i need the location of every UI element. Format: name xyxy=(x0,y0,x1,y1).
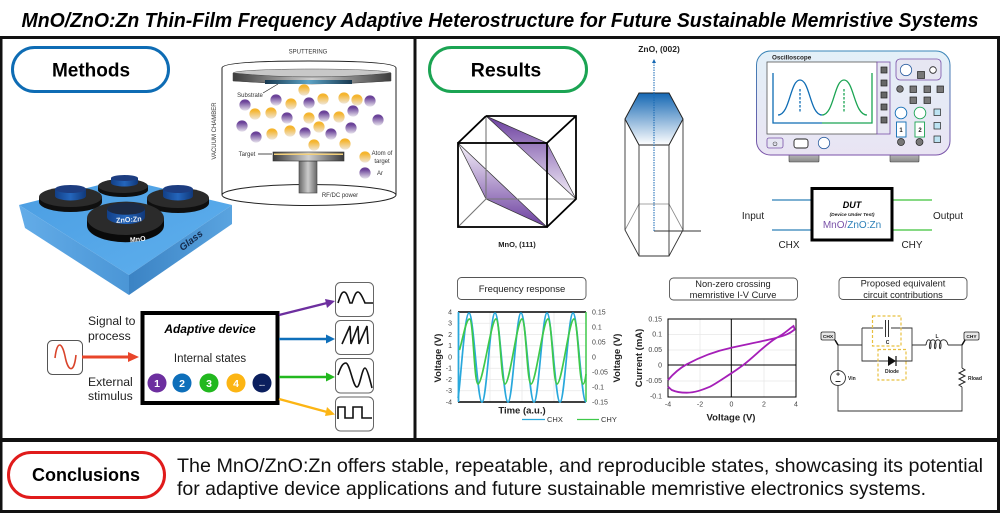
heading: methods xyxy=(12,48,168,92)
diagram: device under test xyxy=(742,188,963,251)
icon: oscilloscope: Oscilloscope xyxy=(772,54,812,62)
legend: CHY xyxy=(601,415,617,424)
diagram: ZnO prism: ZnO, (002) xyxy=(638,44,680,54)
diagram: MnO cube xyxy=(458,116,576,249)
left axis ticks: 4 xyxy=(448,310,452,316)
diagram: device under test: MnO/ZnO:Zn xyxy=(823,220,881,231)
left axis ticks: -2 xyxy=(446,377,452,384)
chart title: Non-zero crossing xyxy=(695,279,771,289)
chart title: Proposed equivalent xyxy=(861,278,946,288)
atoms of target xyxy=(249,84,363,151)
diagram: equivalent circuit: CHY xyxy=(966,334,977,340)
chart title: memristive I-V Curve xyxy=(690,290,776,300)
diagram: sputtering chamber: Ar xyxy=(377,171,383,177)
y ticks: -0.1 xyxy=(650,394,662,400)
diagram: device under test: DUT xyxy=(843,200,863,210)
label: signal to process: process xyxy=(88,329,131,343)
diagram: ZnO prism xyxy=(625,44,701,256)
diagram: sputtering chamber xyxy=(212,50,396,206)
left axis ticks: 2 xyxy=(448,332,452,339)
illustration: device on glass xyxy=(19,175,232,295)
right axis ticks: -0.15 xyxy=(592,400,608,406)
icon: oscilloscope: ⏻ xyxy=(773,141,778,148)
state circles: 3 xyxy=(206,378,212,390)
left axis ticks: -4 xyxy=(446,400,452,406)
diagram: sputtering chamber: Target xyxy=(239,152,256,158)
front disc: ZnO:Zn xyxy=(116,214,142,225)
state circles: 4 xyxy=(233,378,239,390)
state circles: ... xyxy=(259,381,265,388)
diagram: sputtering chamber: VACUUM CHAMBER xyxy=(212,102,218,160)
diagram: sputtering chamber: SPUTTERING xyxy=(289,50,328,56)
diagram: sputtering chamber: RF/DC power xyxy=(322,193,358,199)
adaptive device box: Internal states xyxy=(174,353,246,365)
right axis ticks: 0.05 xyxy=(592,340,606,346)
chart title: Frequency response xyxy=(479,284,565,295)
diagram: equivalent circuit: Rload xyxy=(968,376,982,382)
front disc xyxy=(87,202,164,244)
y ticks: 0.1 xyxy=(652,332,662,338)
heading: conclusions xyxy=(8,452,164,498)
diagram: MnO cube: MnO, (111) xyxy=(498,240,536,249)
icon: input signal xyxy=(48,340,82,374)
chart: I-V curve: Current (mA) xyxy=(634,329,645,387)
heading: results xyxy=(430,48,586,92)
label: signal to process: Signal to xyxy=(88,314,135,328)
right axis ticks: -0.1 xyxy=(592,384,604,392)
chart title xyxy=(458,278,586,300)
diagram: equivalent circuit: CHX xyxy=(823,334,834,340)
chart title: circuit contributions xyxy=(863,290,943,300)
right axis ticks: 0.15 xyxy=(592,310,606,316)
label: external stimulus: External xyxy=(88,375,133,389)
conclusions text: for adaptive device applications and future sustainable memristive electronics systems. xyxy=(177,478,926,500)
diagram: sputtering chamber: Substrate xyxy=(237,93,264,99)
output waveforms xyxy=(336,282,374,431)
heading: conclusions: Conclusions xyxy=(32,465,140,485)
diagram: equivalent circuit: + xyxy=(836,372,840,378)
icon: oscilloscope: 1 xyxy=(899,128,903,134)
illustration: device on glass: Glass xyxy=(178,228,206,254)
right disc xyxy=(147,185,209,213)
y ticks: -0.05 xyxy=(646,378,662,385)
diagram: equivalent circuit xyxy=(821,278,982,411)
x ticks: 2 xyxy=(762,402,766,408)
diagram: equivalent circuit: Diode xyxy=(885,369,899,375)
diagram: device under test: CHX xyxy=(778,240,800,251)
chart: frequency response xyxy=(433,278,623,424)
left axis ticks: 0 xyxy=(448,354,452,362)
argon atoms xyxy=(236,94,384,143)
arrow: state 1 output xyxy=(279,299,335,315)
panel: methods xyxy=(1,38,415,440)
diagram: device under test: (Device Under Test) xyxy=(830,212,875,218)
back disc xyxy=(98,175,148,197)
panel: results xyxy=(415,38,998,440)
adaptive device box xyxy=(142,313,278,403)
arrow: state 4 output xyxy=(279,399,335,416)
diagram: equivalent circuit: L xyxy=(935,334,939,340)
diagram: sputtering chamber: Atom of xyxy=(372,151,393,157)
left axis ticks xyxy=(446,310,452,406)
state circles: 1 xyxy=(154,378,160,390)
diagram: device under test: Input xyxy=(742,211,764,222)
diagram: sputtering chamber: target xyxy=(374,159,390,165)
x ticks: -2 xyxy=(697,402,703,408)
left axis ticks: 3 xyxy=(448,321,452,328)
front disc: MnO xyxy=(130,236,146,244)
diagram: equivalent circuit: C xyxy=(886,340,890,346)
chart: frequency response: Voltage (V) xyxy=(433,334,444,382)
right axis ticks xyxy=(592,310,608,406)
x ticks xyxy=(665,402,798,408)
y ticks xyxy=(646,316,662,400)
left axis ticks: -1 xyxy=(446,366,452,373)
y ticks: 0.05 xyxy=(648,347,662,354)
diagram: device under test: CHY xyxy=(901,240,923,251)
heading: results: Results xyxy=(471,60,541,82)
panel: conclusions xyxy=(1,440,998,512)
y ticks: 0.15 xyxy=(648,316,662,324)
adaptive device box: Adaptive device xyxy=(163,322,256,336)
label: external stimulus: stimulus xyxy=(88,389,133,403)
icon: oscilloscope: 2 xyxy=(918,128,922,134)
left axis ticks: -3 xyxy=(446,388,452,395)
left disc xyxy=(39,185,102,212)
chart: I-V curve xyxy=(634,278,798,424)
y ticks: 0 xyxy=(658,362,662,370)
state circles xyxy=(148,374,272,392)
arrow: state 2 output xyxy=(279,334,335,344)
conclusions text: The MnO/ZnO:Zn offers stable, repeatable, and reproducible states, showcasing its potential xyxy=(177,455,983,477)
diagram: equivalent circuit: Vin xyxy=(848,376,856,382)
right axis ticks: -0.05 xyxy=(592,370,608,376)
right axis ticks: 0 xyxy=(592,354,596,362)
state circles: 2 xyxy=(179,378,185,390)
icon: oscilloscope xyxy=(756,51,950,162)
chart title xyxy=(670,278,798,300)
legend xyxy=(522,415,617,424)
legend: CHX xyxy=(547,415,563,424)
chart: I-V curve: Voltage (V) xyxy=(707,412,755,424)
x ticks: 4 xyxy=(794,402,798,408)
heading: methods: Methods xyxy=(52,60,130,82)
left axis ticks: 1 xyxy=(448,343,452,350)
arrow: state 3 output xyxy=(279,372,335,382)
chart title xyxy=(839,278,967,300)
diagram: device under test: Output xyxy=(933,211,963,222)
chart: frequency response: Time (a.u.) xyxy=(498,406,546,416)
chart: frequency response: Voltage (V) xyxy=(612,334,623,382)
x ticks: -4 xyxy=(665,402,671,408)
title: MnO/ZnO:Zn Thin-Film Frequency Adaptive Heterostructure for Future Sustainable Memristive Systems xyxy=(22,9,978,32)
arrow: input to device xyxy=(82,352,139,362)
x ticks: 0 xyxy=(730,402,734,408)
right axis ticks: 0.1 xyxy=(592,324,602,332)
